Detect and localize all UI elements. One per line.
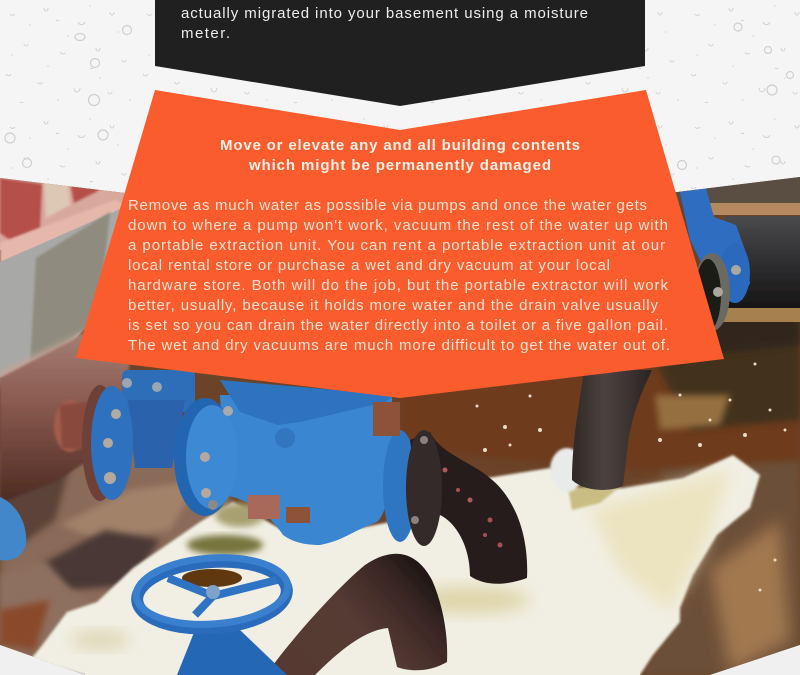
text: water removal instructions: local rental store or purchase a wet and dry vacuum at your local [128, 257, 610, 274]
valve: left blue gate valve [82, 370, 195, 501]
heading: move or elevate contents [220, 137, 580, 174]
valve: top-right blue gate valve and dark pipe [670, 175, 800, 331]
text: water removal instructions: a portable extraction unit. You can rent a portable extraction unit at our [128, 237, 665, 254]
panel: black callout with text [155, 0, 645, 106]
heading: move or elevate contents: Move or elevate any and all building contents [220, 137, 580, 154]
text: water removal instructions: better, usually, because it holds more water and the drain valve usually [128, 297, 658, 314]
small blue flange at left edge [0, 497, 26, 560]
pipe: brown foreground elbow [266, 554, 447, 675]
text: black panel copy [181, 5, 588, 42]
foam: white rushing water [30, 448, 760, 675]
ground: rusty concrete [0, 175, 800, 675]
photo: flooded pipes and valves [0, 175, 800, 675]
valve: main blue check valve [174, 380, 417, 545]
pipe: large reddish left pipe [0, 336, 130, 503]
text: black panel copy: actually migrated into your basement using a moisture [181, 5, 588, 22]
elbow: black speckled pipe [406, 430, 527, 584]
brick wall and concrete blocks [0, 175, 125, 388]
panel: wet white background [0, 0, 800, 230]
white droplet corners: bottom-left and bottom-right [0, 645, 800, 675]
panel: orange callout [76, 90, 724, 398]
text: water removal instructions: hardware store. Both will do the job, but the portable extractor will work [128, 277, 668, 294]
text: water removal instructions: Remove as much water as possible via pumps and once the water gets [128, 197, 647, 214]
ground speckles [476, 362, 786, 592]
heading: move or elevate contents: which might be permanently damaged [248, 157, 551, 174]
text: water removal instructions: is set so you can drain the water directly into a toilet or a five gallon pail. [128, 317, 668, 334]
pipe: vertical dark outlet [572, 370, 652, 490]
handwheel: blue valve wheel [134, 553, 290, 675]
text: black panel copy: meter. [181, 25, 230, 42]
text: water removal instructions: down to where a pump won't work, vacuum the rest of the water up with [128, 217, 668, 234]
text: water removal instructions: The wet and dry vacuums are much more difficult to get the water out of. [128, 337, 670, 354]
text: water removal instructions [128, 197, 670, 354]
